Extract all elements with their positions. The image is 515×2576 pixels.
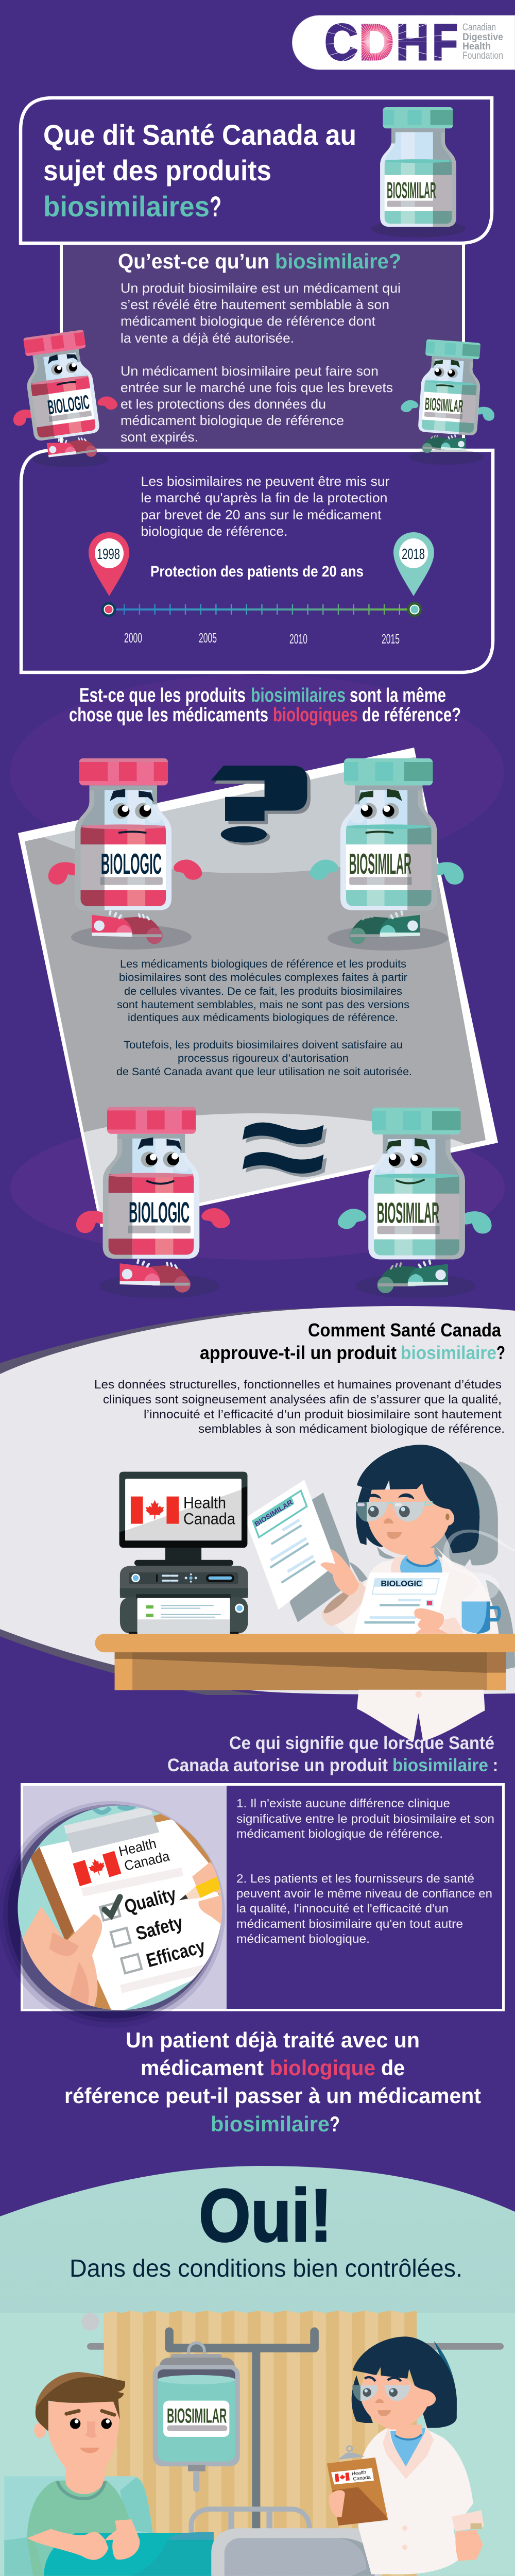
meaning text: 1. Il n'existe aucune différence clinique bbox=[236, 1797, 450, 1810]
comparison text: identiques aux médicaments biologiques de référence. bbox=[128, 1012, 398, 1024]
heading: what is a biosimilar bbox=[118, 249, 401, 273]
physician bbox=[327, 2336, 484, 2574]
character: biologic vial, similar row bbox=[76, 1107, 230, 1298]
timeline years: 2005 bbox=[199, 630, 217, 646]
timeline years: 2000 bbox=[124, 630, 142, 646]
heading: how approved: Comment Santé Canada bbox=[308, 1319, 502, 1341]
answer subtitle: Dans des conditions bien contrôlées. bbox=[70, 2255, 462, 2282]
heading: same as reference biologics: chose que les médicaments bbox=[69, 704, 268, 726]
illustration: reviewer with documents bbox=[245, 1445, 515, 1669]
meaning text: la qualité, l'innocuité et l'efficacité d'un bbox=[236, 1902, 449, 1915]
IV stand and bag bbox=[153, 2332, 315, 2576]
clipboard: Canada bbox=[353, 2475, 371, 2482]
meaning text: médicament biologique. bbox=[236, 1932, 370, 1945]
monitor bbox=[119, 1472, 247, 1566]
panel: authorization meaning bbox=[0, 1785, 504, 2028]
heading: can a patient switch: biologique bbox=[270, 2056, 375, 2080]
document: biologic: BIOLOGIC bbox=[381, 1580, 422, 1588]
heading: can a patient switch: référence peut-il passer à un médicament bbox=[64, 2083, 481, 2108]
character: biosimilar vial, similar row bbox=[338, 1108, 492, 1298]
document: biologic bbox=[353, 1572, 449, 1634]
heading: when Health Canada authorizes bbox=[167, 1733, 498, 1775]
document: biosimilar bbox=[245, 1480, 352, 1622]
checklist bbox=[100, 1884, 208, 1973]
approval text: Les données structurelles, fonctionnelles et humaines provenant d’études bbox=[94, 1378, 502, 1391]
character: biosimilar vial, question row: BIOSIMILAR bbox=[349, 848, 411, 880]
illustration: clipboard checklist: Health bbox=[117, 1836, 158, 1859]
background ellipse: upper bbox=[10, 674, 504, 872]
patent text: par brevet de 20 ans sur le médicament bbox=[141, 507, 382, 522]
meaning text: significative entre le produit biosimilaire et son bbox=[236, 1812, 494, 1825]
timeline caption: Protection des patients de 20 ans bbox=[150, 563, 364, 580]
icon: question mark bbox=[211, 766, 311, 845]
pin: 2018: 2018 bbox=[402, 546, 425, 563]
heading: can a patient switch: médicament bbox=[141, 2056, 264, 2080]
character: biosimilar vial, question row bbox=[310, 758, 464, 951]
character: biologic vial, question row: BIOLOGIC bbox=[101, 848, 162, 880]
heading: when Health Canada authorizes: : bbox=[493, 1755, 498, 1775]
character: biosimilar vial, top bbox=[398, 337, 500, 465]
heading: can a patient switch: biosimilaire bbox=[211, 2112, 330, 2136]
heading: same as reference biologics bbox=[69, 685, 461, 726]
icon: approximately equal sign bbox=[243, 1123, 327, 1177]
definition text: la vente a déjà été autorisée. bbox=[121, 330, 294, 346]
meaning text: 2. Les patients et les fournisseurs de santé bbox=[236, 1872, 474, 1885]
icon: mug bbox=[462, 1601, 499, 1634]
meaning text: médicament biosimilaire qu'en tout autre bbox=[236, 1917, 463, 1930]
comparison text: biosimilaires sont des molécules complexes faites à partir bbox=[119, 972, 407, 984]
pin: 1998 bbox=[89, 532, 129, 596]
timeline years: 2015 bbox=[382, 631, 400, 647]
patient bbox=[4, 2372, 214, 2576]
illustration: clipboard checklist: Canada bbox=[123, 1848, 171, 1874]
definition text: s’est révélé être hautement semblable à son bbox=[121, 297, 389, 312]
title: Que dit Santé Canada au bbox=[43, 118, 356, 151]
definition text: médicament biologique de référence bbox=[121, 413, 344, 428]
checklist: Efficacy bbox=[144, 1936, 208, 1971]
comparison text: Toutefois, les produits biosimilaires doivent satisfaire au bbox=[124, 1039, 403, 1051]
pin: 2018 bbox=[393, 532, 434, 596]
heading: same as reference biologics: Est-ce que les produits bbox=[79, 685, 246, 706]
heading: how approved: biosimilaire bbox=[401, 1342, 496, 1363]
heading: when Health Canada authorizes: biosimilaire bbox=[392, 1755, 488, 1775]
IV stand and bag: BIOSIMILAR bbox=[167, 2404, 227, 2427]
illustration: desk bbox=[95, 1634, 515, 1690]
approval text: l’innocuité et l’efficacité d’un produit biosimilaire sont hautement bbox=[144, 1408, 502, 1421]
pin: 1998: 1998 bbox=[97, 546, 120, 563]
monitor: Canada bbox=[183, 1509, 235, 1528]
timeline years bbox=[124, 630, 400, 647]
approval text: cliniques sont soigneusement analysées afin de s’assurer que la qualité, bbox=[103, 1393, 502, 1406]
heading: how approved bbox=[200, 1319, 505, 1363]
comparison text: de cellules vivantes. De ce fait, les produits biosimilaires bbox=[124, 986, 402, 997]
logo letters bbox=[319, 15, 457, 61]
title: sujet des produits bbox=[43, 154, 271, 187]
timeline years: 2010 bbox=[289, 631, 307, 647]
heading: when Health Canada authorizes: Canada autorise un produit bbox=[167, 1755, 388, 1775]
logo name: Canadian bbox=[462, 22, 496, 33]
definition text: Un médicament biosimilaire peut faire son bbox=[121, 363, 379, 379]
definition text: Un produit biosimilaire est un médicament qui bbox=[121, 280, 401, 296]
heading: same as reference biologics: de référence? bbox=[362, 704, 461, 726]
printer bbox=[120, 1566, 248, 1634]
heading: same as reference biologics: sont la même bbox=[350, 685, 446, 706]
logo name: Foundation bbox=[462, 50, 503, 61]
logo letters: F bbox=[432, 13, 458, 71]
meaning text bbox=[236, 1797, 494, 1945]
definition text: entrée sur le marché une fois que les brevets bbox=[121, 380, 393, 395]
logo name: Health bbox=[462, 41, 491, 52]
title: biosimilaires bbox=[43, 190, 210, 223]
hands and pencil bbox=[16, 1862, 227, 2011]
heading: what is a biosimilar: Qu’est-ce qu’un bbox=[118, 249, 269, 273]
panel: yes section bbox=[0, 2166, 515, 2576]
illustration: monitor and printer bbox=[119, 1472, 248, 1634]
illustration: lab coat hem bbox=[357, 1690, 485, 1741]
logo name bbox=[462, 22, 503, 61]
logo badge bbox=[292, 15, 515, 70]
logo letters: H bbox=[396, 13, 429, 71]
meaning text: peuvent avoir le même niveau de confiance en bbox=[236, 1887, 492, 1900]
panel: comparison sheet bbox=[18, 748, 498, 1227]
character: biologic vial, top bbox=[2, 326, 124, 467]
bed frame bbox=[191, 2509, 382, 2576]
panel: what is a biosimilar bbox=[61, 242, 464, 453]
heading: can a patient switch: Un patient déjà traité avec un bbox=[126, 2028, 420, 2052]
title bbox=[43, 118, 356, 223]
document: biosimilar: BIOSIMILAR bbox=[253, 1498, 294, 1528]
heading: how approved: approuve-t-il un produit bbox=[200, 1342, 397, 1363]
monitor: Health bbox=[183, 1494, 226, 1512]
heading: same as reference biologics: biologiques bbox=[273, 704, 358, 726]
heading: can a patient switch: de bbox=[381, 2056, 405, 2080]
heading: what is a biosimilar: biosimilaire? bbox=[275, 249, 401, 273]
big answer: Oui! bbox=[199, 2174, 332, 2257]
meaning text: médicament biologique de référence. bbox=[236, 1827, 443, 1840]
approval text bbox=[94, 1378, 505, 1435]
comparison text: processus rigoureux d’autorisation bbox=[178, 1053, 349, 1064]
timeline axis bbox=[102, 603, 421, 616]
character: biologic vial, similar row: BIOLOGIC bbox=[129, 1196, 190, 1228]
icon: biosimilar vial bbox=[371, 107, 466, 238]
checklist: Safety bbox=[133, 1911, 185, 1944]
illustration: clipboard checklist bbox=[0, 1801, 230, 2028]
approval text: semblables à son médicament biologique de référence. bbox=[198, 1422, 505, 1435]
logo letters: C bbox=[324, 13, 358, 71]
logo name: Digestive bbox=[462, 32, 503, 43]
comparison text bbox=[116, 958, 412, 1078]
character: biologic vial, question row bbox=[48, 758, 202, 950]
patent text bbox=[141, 473, 390, 539]
panel: how Health Canada approves bbox=[0, 1306, 515, 1695]
heading: can a patient switch bbox=[64, 2028, 481, 2136]
panel: patent protection timeline bbox=[21, 450, 493, 672]
heading: when Health Canada authorizes: Ce qui signifie que lorsque Santé bbox=[229, 1733, 494, 1753]
heading: same as reference biologics: biosimilaires bbox=[251, 685, 346, 706]
definition text: sont expirés. bbox=[121, 429, 198, 445]
panel: title box bbox=[21, 98, 492, 243]
patent text: biologique de référence. bbox=[141, 523, 287, 539]
checklist: Quality bbox=[122, 1884, 179, 1918]
comparison text: sont hautement semblables, mais ne sont pas des versions bbox=[117, 999, 409, 1011]
definition text bbox=[121, 280, 401, 445]
clipboard bbox=[327, 2446, 388, 2526]
background ellipse: lower bbox=[10, 1115, 505, 1260]
heading: can a patient switch: ? bbox=[330, 2112, 340, 2136]
definition text: et les protections des données du bbox=[121, 396, 326, 412]
illustration: patient and physician bbox=[0, 2311, 515, 2576]
heading: how approved: ? bbox=[496, 1342, 505, 1363]
character: biologic vial, top: BIOLOGIC bbox=[46, 391, 91, 419]
clipboard: Health bbox=[351, 2470, 367, 2477]
comparison text: Les médicaments biologiques de référence et les produits bbox=[120, 958, 406, 970]
patent text: le marché qu'après la fin de la protection bbox=[141, 490, 387, 505]
logo letters: D bbox=[359, 13, 394, 71]
comparison text: de Santé Canada avant que leur utilisation ne soit autorisée. bbox=[116, 1066, 412, 1078]
title: ? bbox=[210, 190, 221, 223]
definition text: médicament biologique de référence dont bbox=[121, 313, 376, 329]
patent text: Les biosimilaires ne peuvent être mis sur bbox=[141, 473, 390, 489]
